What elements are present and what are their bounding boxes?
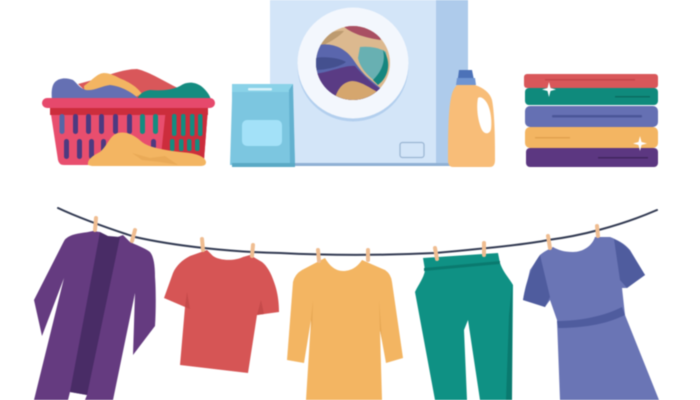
basket body: [50, 108, 208, 165]
dress belt: [557, 307, 625, 328]
clothes pegs: [95, 218, 598, 261]
stack of folded clothes: [524, 74, 658, 167]
clothesline: [58, 208, 657, 255]
purple robe: [34, 231, 156, 400]
folded blue: [525, 106, 658, 127]
drum window with clothes: [315, 25, 391, 105]
sleeve left: [523, 255, 550, 307]
control button: [400, 142, 424, 158]
pile of clothes in basket: [52, 69, 211, 100]
washing machine: [270, 0, 468, 166]
spilled garment: [88, 133, 206, 166]
folded red: [524, 74, 658, 88]
folded orange: [525, 127, 658, 148]
blue dress: [523, 237, 659, 400]
yellow shirt: [287, 258, 403, 400]
green trousers: [415, 253, 513, 400]
waistband shadow: [424, 261, 500, 271]
detergent box: [230, 84, 295, 167]
basket rim: [42, 98, 215, 108]
folded teal: [525, 88, 658, 105]
basket slots: [60, 114, 202, 159]
bottle handle: [477, 97, 491, 133]
red t-shirt: [164, 250, 279, 373]
sleeve right: [614, 239, 645, 288]
detergent bottle: [448, 70, 495, 167]
sparkle: [633, 136, 647, 151]
laundry basket: [42, 69, 215, 166]
folded purple: [526, 148, 658, 167]
sparkle: [542, 82, 556, 97]
box label: [242, 120, 282, 146]
